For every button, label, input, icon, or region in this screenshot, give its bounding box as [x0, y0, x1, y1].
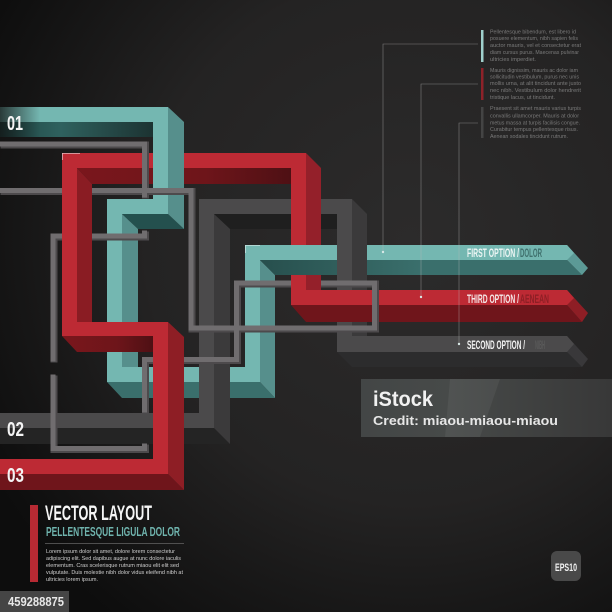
EPS10 badge — [551, 551, 581, 581]
option labels: AENEAN — [520, 294, 549, 306]
note 1: posuere elementum, nibh sapien felis — [490, 36, 579, 42]
stock id tag: 459288875 — [8, 595, 64, 609]
note 3 — [481, 106, 582, 140]
note 3: Curabitur tempus pellentesque risus. — [490, 127, 578, 133]
option labels: DOLOR — [520, 248, 542, 260]
bottom heading block: adipiscing elit. Sed dapibus augue at nunc dolore iaculis — [46, 556, 181, 562]
watermark band: iStock — [373, 388, 433, 411]
note 2: sollicitudin vestibulum, purus nec unis — [490, 74, 580, 80]
note 1: Pellentesque bibendum, est libero id — [490, 30, 576, 36]
bottom heading block: VECTOR LAYOUT — [45, 502, 152, 525]
option labels: SECOND OPTION / — [467, 340, 525, 352]
text: NIBH — [535, 340, 545, 352]
note 3: convallis ullamcorper. Mauris at dolor — [490, 114, 579, 120]
bottom heading block: Lorem ipsum dolor sit amet, dolore lorem consectetur — [46, 549, 175, 555]
thin gray frame — [0, 144, 376, 450]
note 1: auctor mauris, vel et consectetur erat — [490, 43, 582, 49]
gray ribbon overlaps — [199, 245, 367, 398]
note 1 — [481, 30, 582, 63]
note 1: ultricies imperdiet. — [490, 57, 536, 63]
option labels: FIRST OPTION / — [467, 248, 519, 260]
note 3: Aenean sodales tincidunt rutrum. — [490, 134, 568, 140]
watermark band: Credit: miaou-miaou-miaou — [373, 413, 558, 428]
note 2: tristique lacus, ut tincidunt. — [490, 95, 555, 101]
gray ribbon 02 — [0, 199, 588, 444]
watermark band — [361, 379, 612, 437]
left fades — [0, 107, 40, 137]
note 1: diam cursus purus. Maecenas pulvinar — [490, 50, 579, 56]
teal corner highlight — [245, 245, 260, 253]
note 2 — [481, 68, 582, 101]
bottom heading block: elementum. Cras scelerisque rutrum miaou elit elit sed — [46, 563, 179, 569]
bottom heading block: vulputate. Duis molestie nibh dolor vidus eleifend nibh at — [46, 570, 183, 576]
number 03: 03 — [7, 465, 24, 487]
marker dots — [382, 251, 460, 345]
bottom heading block: PELLENTESQUE LIGULA DOLOR — [46, 524, 180, 539]
connector lines to notes — [383, 44, 478, 343]
note 2: nec nibh. Vestibulum dolor hendrerit — [490, 88, 582, 94]
bottom heading block — [30, 502, 184, 583]
note 3: metus massa at turpis facilisis congue. — [490, 120, 580, 126]
number 01: 01 — [7, 113, 23, 135]
option labels: THIRD OPTION / — [467, 294, 519, 306]
thin gray frame overlaps — [142, 153, 379, 322]
note 2: Mauris dignissim, mauris ac dolor iam — [490, 68, 578, 74]
teal ribbon 01 — [0, 107, 588, 398]
red ribbon 03 — [0, 153, 588, 490]
stock id tag — [0, 591, 69, 612]
note 3: Praesent sit amet mauris varius turpis — [490, 106, 582, 112]
bottom heading block: ultricies lorem ipsum. — [46, 577, 98, 583]
note 2: mollis urna, at alit tincidunt ante justo — [490, 81, 581, 87]
number 02: 02 — [7, 419, 24, 441]
option labels — [467, 248, 549, 352]
EPS10 badge: EPS10 — [555, 562, 577, 574]
teal ribbon overlaps — [153, 153, 321, 275]
